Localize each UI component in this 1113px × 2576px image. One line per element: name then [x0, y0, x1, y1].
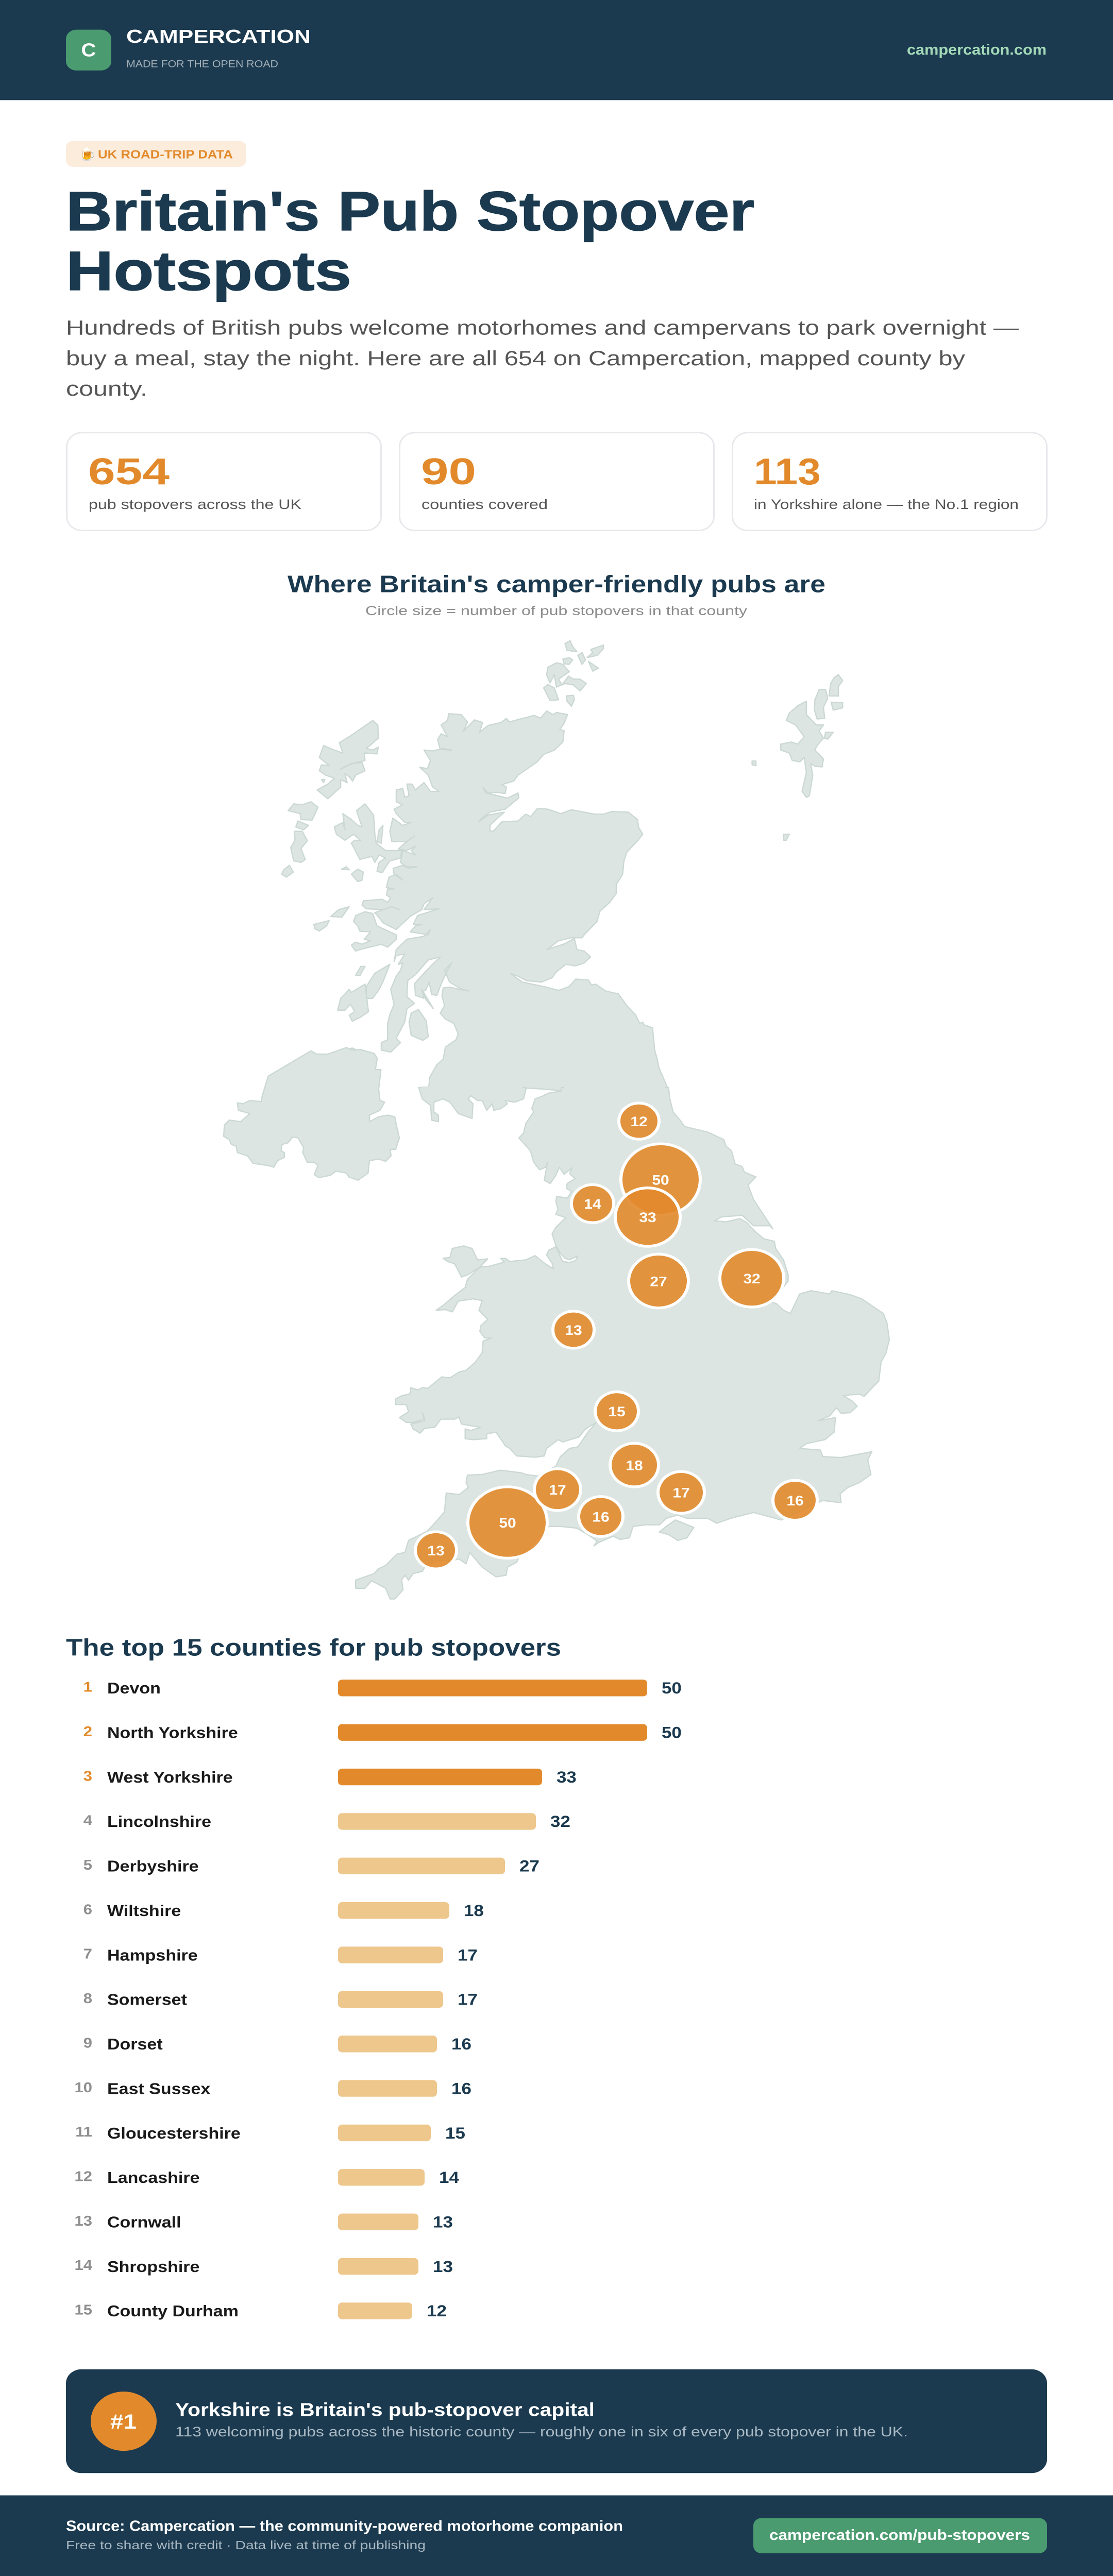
- row: Devon: [83, 1679, 682, 1698]
- row: Shropshire: 14: [75, 2258, 93, 2274]
- row: County Durham: County Durham: [107, 2302, 239, 2320]
- badge: 🍺: [78, 146, 96, 161]
- brand name: CAMPERCATION: [126, 27, 311, 47]
- row: East Sussex: [75, 2079, 471, 2098]
- circle: Cornwall 13: [415, 1532, 457, 1569]
- stat card: Yorkshire: in Yorkshire alone — the No.1 region: [754, 497, 1019, 512]
- circle: West Yorkshire 33: [615, 1188, 680, 1246]
- row: Somerset: Somerset: [107, 1991, 187, 2008]
- county circles: [415, 1103, 817, 1569]
- stat card: Yorkshire: 113: [754, 451, 821, 493]
- circle: Hampshire 17: 17: [672, 1485, 690, 1501]
- circle: Cornwall 13: 13: [427, 1543, 445, 1559]
- row: Derbyshire: 27: [519, 1857, 539, 1875]
- badge: UK ROAD-TRIP DATA: [98, 148, 233, 161]
- circle: Dorset 16: 16: [592, 1510, 610, 1525]
- land: Scotland and islands: [282, 641, 842, 1091]
- row: Hampshire: 17: [458, 1946, 478, 1964]
- subtitle: county.: [66, 377, 147, 400]
- circle: Devon 50: [468, 1487, 547, 1558]
- stat card: Yorkshire: [733, 433, 1047, 531]
- row: Somerset: [83, 1990, 478, 2009]
- row: Derbyshire: [83, 1857, 539, 1875]
- row: West Yorkshire: 33: [556, 1768, 577, 1786]
- row: Somerset: 8: [83, 1990, 92, 2007]
- stat card: total stopovers: [67, 433, 381, 531]
- callout text: 113 welcoming pubs across the historic county — roughly one in six of every pub stopover in the UK.: [175, 2425, 908, 2440]
- row: Wiltshire: 6: [83, 1902, 92, 1918]
- row: Hampshire: 7: [83, 1946, 92, 1962]
- title: Britain's Pub Stopover: [66, 181, 754, 243]
- circle: North Yorkshire 50: 50: [652, 1173, 669, 1188]
- title: [66, 181, 754, 302]
- subtitle: Hundreds of British pubs welcome motorhomes and campervans to park overnight —: [66, 316, 1019, 339]
- callout heading: Yorkshire is Britain's pub-stopover capital: [175, 2400, 595, 2420]
- source line: Source: Campercation — the community-powered motorhome companion: [66, 2518, 623, 2534]
- circle: Somerset 17: 17: [549, 1483, 566, 1498]
- row: County Durham: 12: [427, 2302, 447, 2320]
- circle: East Sussex 16: [773, 1480, 817, 1520]
- circle: Shropshire 13: [553, 1311, 594, 1348]
- row: Derbyshire: Derbyshire: [107, 1857, 199, 1875]
- call to action button: [753, 2518, 1047, 2553]
- row: Dorset: 16: [451, 2036, 471, 2054]
- row: Lincolnshire: [83, 1812, 570, 1831]
- circle: Wiltshire 18: 18: [626, 1458, 643, 1473]
- row: Lancashire: 14: [439, 2169, 459, 2187]
- circle: Gloucestershire 15: 15: [608, 1404, 626, 1420]
- credit line: Free to share with credit · Data live at time of publishing: [66, 2539, 426, 2552]
- row: Derbyshire: 5: [83, 1857, 92, 1873]
- row: Lancashire: Lancashire: [107, 2169, 199, 2187]
- circle: County Durham 12: [619, 1103, 659, 1139]
- row: North Yorkshire: [83, 1723, 682, 1742]
- bar chart heading: The top 15 counties for pub stopovers: [66, 1634, 561, 1661]
- header bar: [0, 0, 1113, 100]
- circle: Lancashire 14: 14: [584, 1197, 601, 1212]
- title: Hotspots: [66, 241, 351, 302]
- row: Cornwall: [75, 2213, 453, 2231]
- circle: Hampshire 17: [658, 1471, 704, 1513]
- row: North Yorkshire: 50: [662, 1724, 682, 1742]
- row: North Yorkshire: 2: [83, 1723, 92, 1740]
- circle: Somerset 17: [534, 1469, 581, 1511]
- icon: number one badge: #1: [110, 2410, 137, 2433]
- circle: Wiltshire 18: [610, 1443, 659, 1487]
- land: Northern Ireland, England, Wales: [224, 1047, 889, 1599]
- row: Shropshire: [75, 2258, 453, 2276]
- row: Lancashire: [75, 2168, 459, 2187]
- callout: [66, 2369, 1047, 2473]
- seam patch: [421, 1087, 665, 1092]
- subtitle: [66, 316, 1019, 400]
- circle: Lincolnshire 32: 32: [743, 1271, 761, 1287]
- icon: number one badge: [91, 2392, 157, 2451]
- row: Lincolnshire: 4: [83, 1812, 93, 1828]
- badge: [66, 141, 246, 167]
- row: West Yorkshire: West Yorkshire: [107, 1768, 233, 1786]
- row: Shropshire: Shropshire: [107, 2258, 199, 2275]
- row: County Durham: 15: [75, 2302, 92, 2318]
- row: Somerset: 17: [458, 1991, 478, 2009]
- circle: East Sussex 16: 16: [786, 1493, 804, 1509]
- circle: Lancashire 14: [571, 1184, 614, 1223]
- circle: County Durham 12: 12: [630, 1114, 648, 1130]
- row: Lincolnshire: Lincolnshire: [107, 1813, 211, 1831]
- row: East Sussex: 10: [75, 2079, 92, 2095]
- row: Wiltshire: 18: [464, 1902, 484, 1920]
- row: Cornwall: 13: [433, 2213, 453, 2231]
- row: Dorset: Dorset: [107, 2036, 163, 2053]
- row: West Yorkshire: [83, 1768, 577, 1786]
- website link: campercation.com: [907, 42, 1047, 58]
- footer: [0, 2495, 1113, 2576]
- row: Dorset: [83, 2035, 471, 2054]
- bar chart: [75, 1679, 682, 2320]
- stat card: counties: counties covered: [421, 497, 548, 512]
- row: Dorset: 9: [83, 2035, 92, 2051]
- logo icon: C: [81, 41, 96, 61]
- map of the UK: [224, 641, 889, 1599]
- stat card: counties: [400, 433, 714, 531]
- call to action button: campercation.com/pub-stopovers: [769, 2527, 1030, 2543]
- row: Wiltshire: Wiltshire: [107, 1902, 181, 1920]
- row: Devon: 1: [83, 1679, 92, 1695]
- stat card: total stopovers: pub stopovers across the UK: [89, 497, 301, 512]
- circle: West Yorkshire 33: 33: [639, 1210, 656, 1226]
- circle: Dorset 16: [579, 1497, 623, 1536]
- circle: Lincolnshire 32: [720, 1249, 784, 1307]
- circle: Derbyshire 27: 27: [650, 1274, 667, 1290]
- map heading: Where Britain's camper-friendly pubs are: [288, 571, 825, 598]
- row: Devon: Devon: [107, 1680, 161, 1697]
- subtitle: buy a meal, stay the night. Here are all 654 on Campercation, mapped county by: [66, 347, 965, 369]
- row: Lancashire: 12: [75, 2168, 92, 2184]
- row: Gloucestershire: 15: [445, 2124, 465, 2142]
- row: West Yorkshire: 3: [83, 1768, 92, 1784]
- row: Shropshire: 13: [433, 2258, 453, 2276]
- circle: Shropshire 13: 13: [565, 1323, 582, 1338]
- circle: Devon 50: 50: [499, 1515, 516, 1531]
- row: Hampshire: [83, 1946, 478, 1964]
- row: East Sussex: 16: [451, 2080, 471, 2098]
- stat card: counties: 90: [421, 451, 476, 493]
- row: Gloucestershire: [75, 2124, 465, 2142]
- row: Hampshire: Hampshire: [107, 1946, 198, 1964]
- row: East Sussex: East Sussex: [107, 2080, 210, 2097]
- row: Gloucestershire: 11: [75, 2124, 92, 2140]
- brand tagline: MADE FOR THE OPEN ROAD: [126, 58, 278, 70]
- circle: Gloucestershire 15: [595, 1392, 638, 1431]
- row: Gloucestershire: Gloucestershire: [107, 2124, 241, 2142]
- row: Devon: 50: [662, 1680, 682, 1698]
- logo icon: [66, 30, 111, 71]
- row: Cornwall: Cornwall: [107, 2213, 181, 2231]
- circle: North Yorkshire 50: [621, 1144, 700, 1215]
- row: Wiltshire: [83, 1902, 484, 1920]
- row: Cornwall: 13: [75, 2213, 92, 2229]
- row: Lincolnshire: 32: [550, 1813, 570, 1831]
- stat card: total stopovers: 654: [88, 451, 170, 493]
- circle: Derbyshire 27: [629, 1254, 688, 1308]
- row: North Yorkshire: North Yorkshire: [107, 1724, 238, 1741]
- row: County Durham: [75, 2302, 447, 2320]
- map subheading: Circle size = number of pub stopovers in that county: [365, 603, 748, 618]
